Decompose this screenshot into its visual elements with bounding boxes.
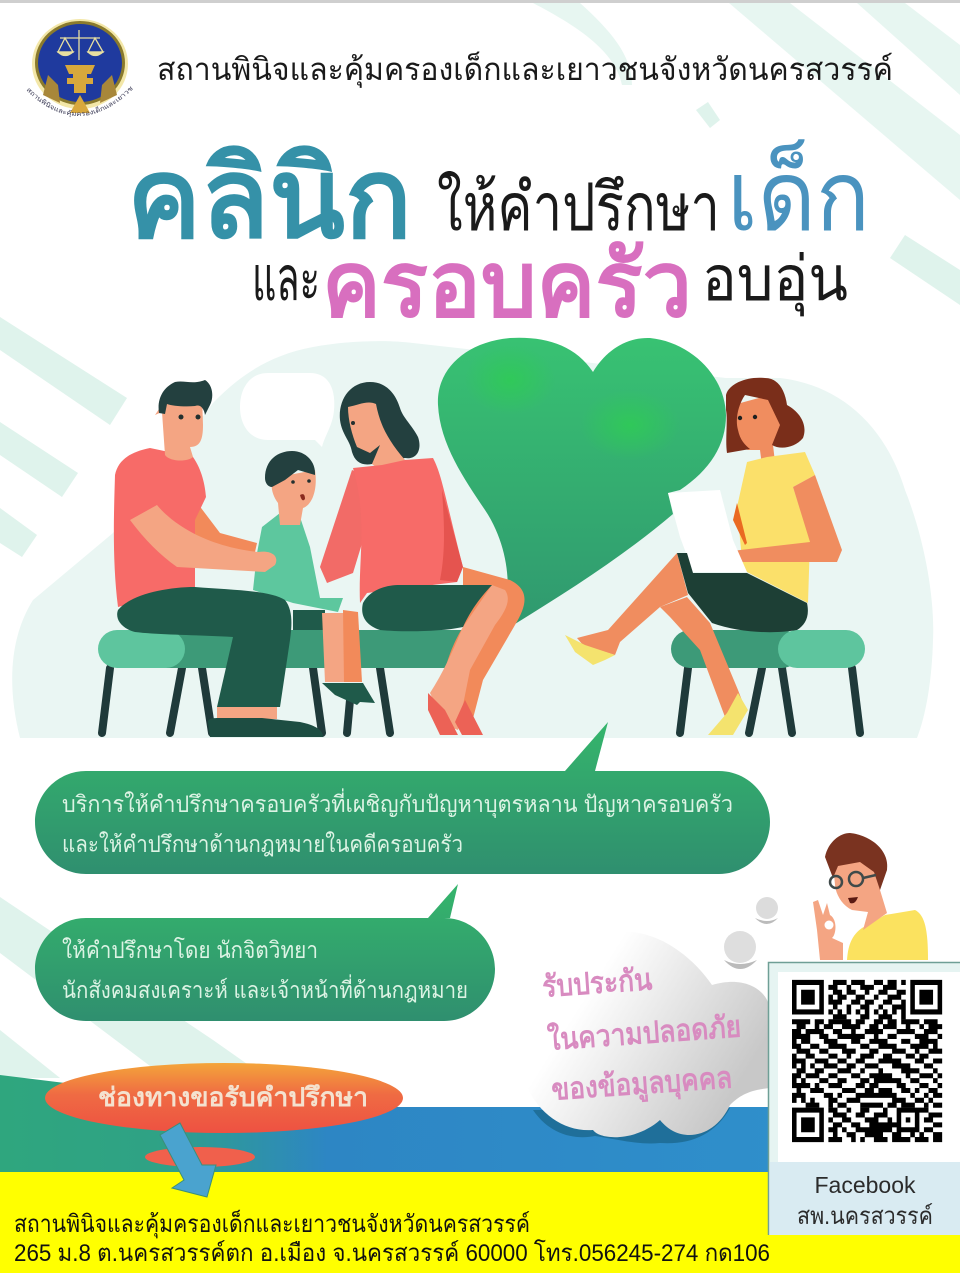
woman hair [340,382,419,464]
yellow address band [0,1172,960,1273]
counselor skirt [677,553,808,632]
address text [14,1209,770,1267]
man hair [825,833,887,890]
counselor arm [723,475,842,562]
speech panel 2 text: ให้คำปรึกษาโดย นักจิตวิทยา [62,937,318,963]
address text: 265 ม.8 ต.นครสวรรค์ตก อ.เมือง จ.นครสวรรค์ 60000 โทร.056245-274 กด106 [14,1239,770,1267]
woman far leg [440,567,525,730]
man glasses [830,872,876,888]
man mouth [848,897,858,903]
man far arm [195,500,257,552]
title: คลินิก [127,136,412,261]
boy shirt [253,513,343,612]
woman torso [353,458,463,603]
icon: side ornaments [43,75,117,103]
woman figure [320,382,525,735]
icon: pedestal [65,65,95,93]
cloud body [513,932,770,1137]
orange channel ellipse: ช่องทางขอรับคำปรึกษา [98,1082,368,1112]
woman shoes [428,693,483,735]
speech panel 2 text: นักสังคมสงเคราะห์ และเจ้าหน้าที่ด้านกฎหมาย [62,974,468,1003]
man shirt [114,448,206,607]
QR code [792,982,942,1140]
boy figure [253,451,375,705]
boy head [272,470,316,525]
speech panel 1 text: บริการให้คำปรึกษาครอบครัวที่เผชิญกับปัญหาบุตรหลาน ปัญหาครอบครัว [62,788,733,818]
speech panel 1 [35,722,770,874]
cloud text: ในความปลอดภัย [546,1009,742,1057]
title: อบอุ่น [702,245,848,316]
boy hair [265,451,315,487]
woman near leg [430,585,508,730]
Facebook label: สพ.นครสวรรค์ [797,1202,933,1230]
counselor figure [565,378,842,735]
title: ครอบครัว [322,234,692,336]
man neck and face [155,395,203,461]
title: เด็ก [727,139,870,251]
boy shoes [322,683,375,705]
man hair [159,380,212,415]
thought cloud [513,897,778,1143]
counselor raised leg [577,553,688,655]
arrow [160,1123,216,1197]
QR panel [768,962,960,1235]
counselor hair [726,378,805,453]
pale scene backdrop [12,341,933,738]
speech panel 1 text [62,788,733,857]
cloud text [541,963,742,1109]
counselor face [733,395,783,466]
title [127,136,870,336]
Facebook label [797,1172,933,1230]
man ok hand [813,900,843,960]
man shoes [208,718,323,737]
icon: scales [58,30,103,60]
woman arm [320,470,375,583]
man neck and face [833,860,887,930]
header organisation name: สถานพินิจและคุ้มครองเด็กและเยาวชนจังหวัดนครสวรรค์ [157,51,893,89]
counselor paper [668,490,747,572]
small coral ellipse [145,1147,255,1167]
white speech bubble [240,373,334,447]
cloud text: รับประกัน [541,963,654,1004]
icon: lotus [70,95,90,113]
bottom green-blue band [0,1075,780,1172]
address text: สถานพินิจและคุ้มครองเด็กและเยาวชนจังหวัดนครสวรรค์ [14,1209,530,1239]
top grey strip [0,0,960,3]
man near arm [130,505,276,572]
green heart [438,338,726,624]
counselor shirt [737,452,815,603]
counselor shoes [565,635,748,735]
cartoon man with glasses [813,833,928,960]
logo [26,19,133,118]
man ankles [217,707,277,719]
cloud text: ของข้อมูลบุคคล [550,1061,733,1109]
boy shorts and legs [293,610,325,630]
woman face [348,402,405,472]
man shirt [847,910,928,960]
title: และ [252,245,320,314]
Facebook label: Facebook [814,1172,916,1198]
bench legs [102,668,390,733]
man pants [117,587,291,707]
cloud shadow [533,1108,730,1143]
title: ให้คำปรึกษา [437,170,720,244]
speech panel 2 [35,884,495,1021]
woman skirt [362,585,492,631]
man figure [114,380,323,737]
counselor bench [671,630,865,733]
counselor standing leg [660,597,743,717]
cloud bubbles [724,897,778,969]
family bench [98,630,465,733]
speech panel 1 text: และให้คำปรึกษาด้านกฎหมายในคดีครอบครัว [62,831,463,857]
orange channel ellipse [45,1063,403,1133]
speech panel 2 text [62,937,468,1003]
